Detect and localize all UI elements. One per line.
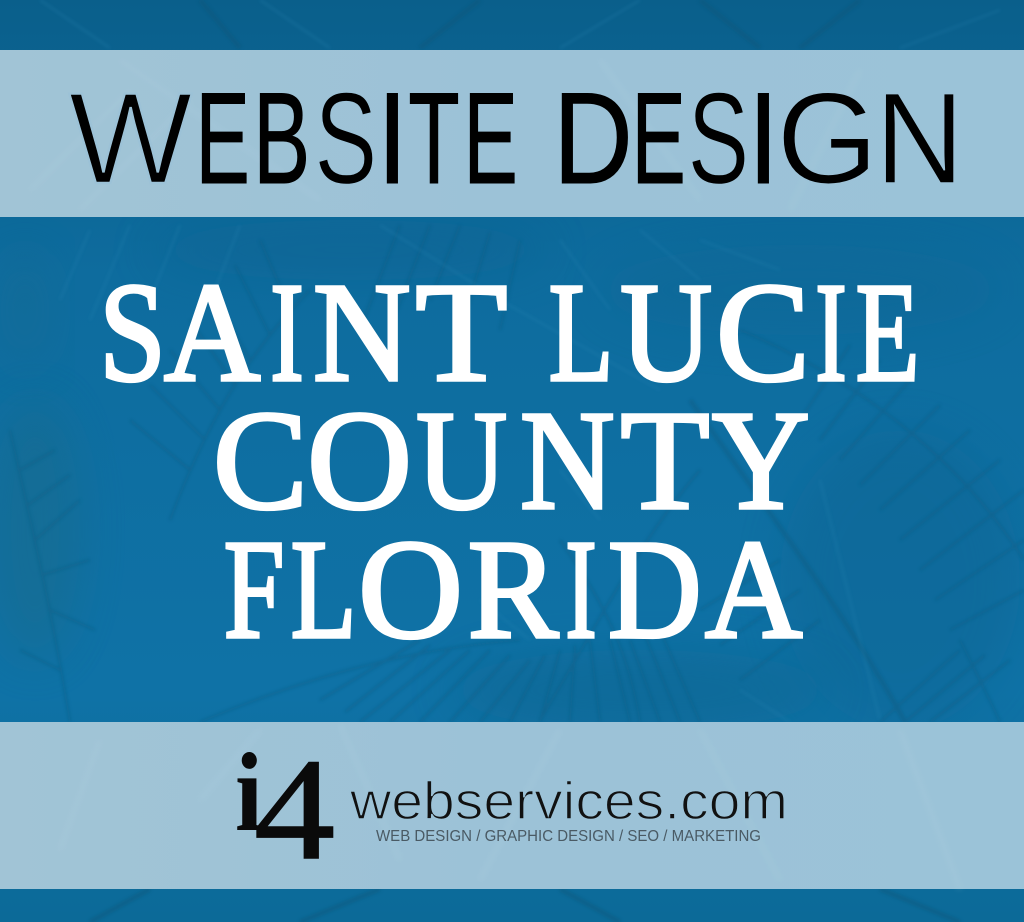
title line: county: U — [416, 381, 507, 539]
heading: website design: I — [748, 65, 779, 211]
bottom band — [0, 722, 1024, 889]
top band — [0, 50, 1024, 217]
title line: county: T — [620, 381, 710, 539]
heading: website design: E — [464, 65, 518, 211]
title: saint lucie county florida — [99, 253, 919, 668]
heading: website design: E — [196, 65, 250, 211]
logo mark: i4: i — [235, 731, 263, 855]
title line: saint lucie: N — [313, 253, 411, 411]
heading: website design: B — [253, 65, 310, 211]
heading: website design: G — [776, 65, 878, 211]
title line: county: N — [520, 381, 615, 539]
title line: florida: O — [358, 510, 463, 668]
title line: saint lucie: I — [270, 253, 304, 411]
heading: website design: T — [408, 65, 460, 211]
title line: florida: D — [608, 510, 702, 668]
logo mark: i4: 4 — [254, 730, 335, 890]
title line: florida: I — [565, 510, 597, 668]
heading: website design: S — [688, 65, 749, 211]
heading: website design: S — [315, 65, 377, 211]
title line: saint lucie: L — [549, 253, 614, 411]
title line: florida: F — [224, 510, 284, 668]
title line: saint lucie: E — [856, 253, 919, 411]
title line: saint lucie: I — [815, 253, 847, 411]
heading: website design: I — [377, 65, 408, 211]
title line: county: Y — [712, 381, 810, 539]
heading: website design: N — [875, 65, 964, 211]
heading: website design: E — [632, 65, 686, 211]
title line: florida: R — [468, 510, 559, 668]
logo: i4 webservices.com — [235, 730, 788, 890]
title line: saint lucie: S — [99, 253, 166, 411]
title line: county: O — [307, 381, 412, 539]
title line: florida: A — [705, 510, 802, 668]
title line: saint lucie: C — [716, 253, 810, 411]
heading: website design: W — [69, 65, 193, 211]
title line: county: C — [213, 381, 308, 539]
heading: website design: D — [553, 65, 633, 211]
logo tagline: WEB DESIGN / GRAPHIC DESIGN / SEO / MARKETING — [376, 828, 761, 845]
title line: florida: L — [291, 510, 356, 668]
title line: saint lucie: T — [416, 253, 505, 411]
logo wordmark: webservices.com — [349, 772, 788, 831]
title line: saint lucie: A — [164, 253, 260, 411]
title line: saint lucie: U — [620, 253, 712, 411]
